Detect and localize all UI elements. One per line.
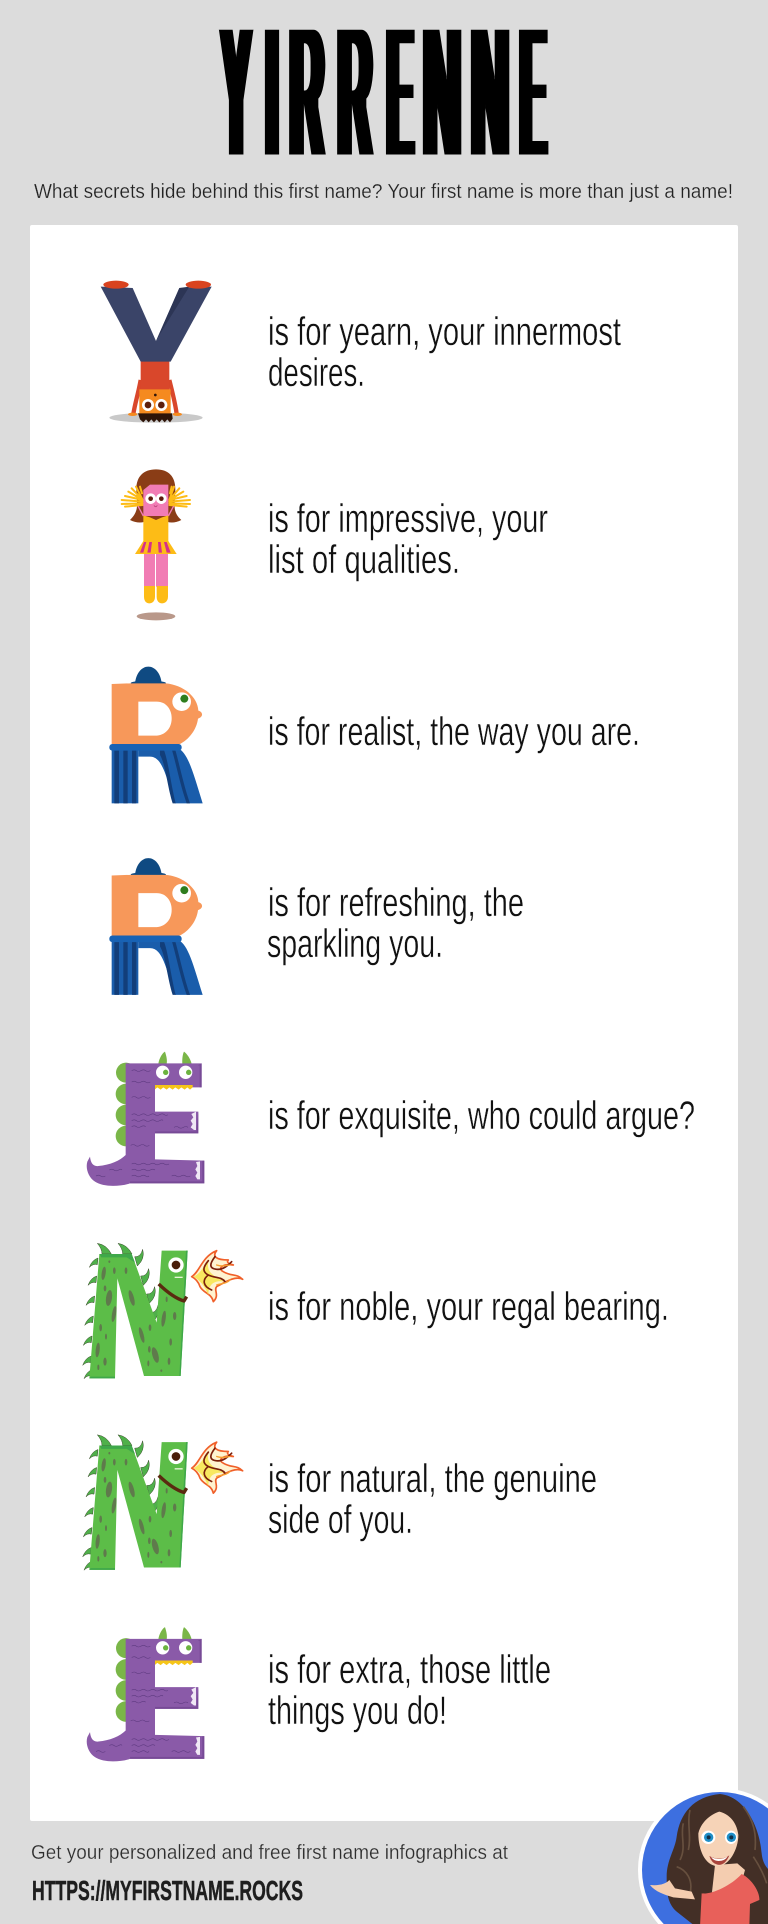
row: second letter N xyxy=(83,1435,597,1570)
footer url: HTTPS://MYFIRSTNAME.ROCKS xyxy=(32,1875,303,1906)
footer prompt text: Get your personalized and free first name infographics at xyxy=(31,1842,508,1864)
text: second N: is for natural, the genuine xyxy=(268,1457,597,1501)
icon: purple E monster repeat xyxy=(87,1627,204,1761)
text: second R: sparkling you. xyxy=(267,922,443,966)
icon: orange R character repeat xyxy=(109,858,203,995)
subtitle: What secrets hide behind this first name? Your first name is more than just a name! xyxy=(34,180,733,203)
icon: handstanding Y character xyxy=(101,281,212,423)
icon: orange R character xyxy=(109,667,203,803)
row: letter R xyxy=(109,667,640,803)
icon: cheerleader I character xyxy=(122,469,190,620)
row: letter Y xyxy=(101,281,621,423)
text: second N: side of you. xyxy=(268,1498,413,1542)
panel: white card xyxy=(30,225,738,1821)
row: letter N xyxy=(83,1243,669,1379)
row: letter E xyxy=(87,1052,695,1186)
text: Y: is for yearn, your innermost xyxy=(268,310,621,354)
row: second letter R xyxy=(109,858,524,995)
avatar: woman in blue circle xyxy=(638,1790,768,1924)
text: second E: things you do! xyxy=(268,1689,447,1733)
text: I: list of qualities. xyxy=(268,538,460,582)
text: second R: is for refreshing, the xyxy=(268,881,524,925)
icon: purple E monster xyxy=(87,1052,204,1186)
row: second letter E xyxy=(87,1627,551,1761)
text: Y: desires. xyxy=(268,351,365,395)
icon: green N dragon with fire xyxy=(83,1243,243,1379)
text: second E: is for extra, those little xyxy=(268,1648,551,1692)
icon: green N dragon repeat xyxy=(83,1435,243,1570)
row: letter I xyxy=(122,469,548,620)
text: I: is for impressive, your xyxy=(268,497,548,541)
